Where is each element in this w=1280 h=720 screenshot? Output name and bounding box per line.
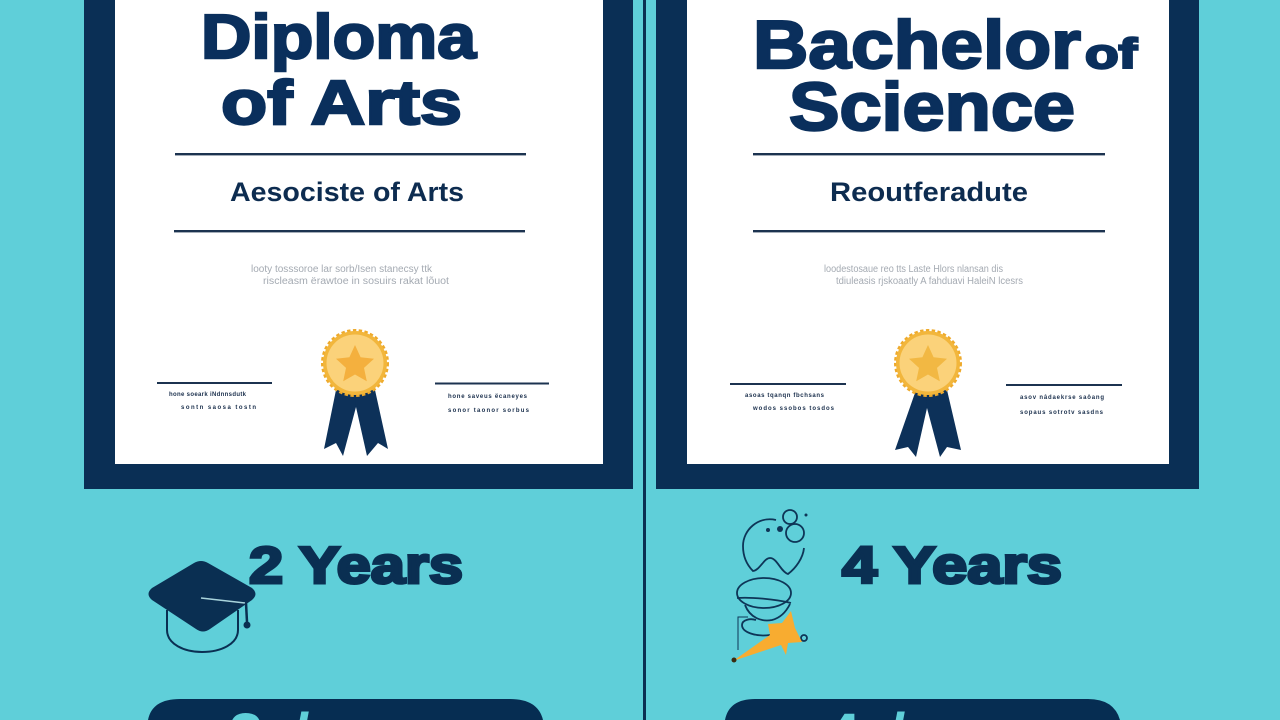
left signature: wodos ssobos tosdos	[752, 406, 835, 412]
fine print: loodestosaue reo tts Laste Hlors nlansan dis	[824, 264, 1003, 275]
heading: diploma of arts: of Arts	[221, 69, 462, 138]
heading: bachelor of science: of	[1085, 30, 1138, 77]
subtitle: Aesociste of Arts	[230, 177, 464, 207]
fine print	[251, 264, 449, 287]
right signature: hone saveus ëcaneyes	[448, 394, 528, 400]
heading: bachelor of science: Bachelor	[753, 7, 1081, 83]
duration: 2 years: 2 Years	[249, 537, 463, 595]
icon: abstract doodle with star	[732, 510, 808, 662]
fine print	[824, 264, 1023, 287]
icon: award ribbon	[322, 330, 388, 456]
heading: diploma of arts: Diploma	[201, 3, 477, 72]
panel: bachelor of science	[656, 0, 1199, 489]
certificate frame	[84, 0, 633, 489]
right signature	[435, 382, 549, 414]
icon: graduation cap	[148, 561, 256, 652]
fine print: tdiuleasis rjskoaatly A fahduavi HaleiN lcesrs	[836, 276, 1023, 287]
certificate frame	[656, 0, 1199, 489]
badge: right pill	[725, 699, 1120, 720]
heading: bachelor of science	[753, 7, 1138, 145]
heading: bachelor of science: Science	[789, 69, 1075, 145]
fine print: looty tosssoroe lar sorb/Isen stanecsy ttk	[251, 264, 433, 275]
heading: diploma of arts	[201, 3, 477, 138]
left signature	[157, 382, 272, 411]
icon: award ribbon	[895, 330, 961, 457]
right signature: sopaus sotrotv sasdns	[1020, 410, 1104, 416]
panel: diploma of arts	[84, 0, 633, 489]
right signature	[1006, 384, 1122, 416]
certificate paper	[115, 0, 603, 464]
certificate paper	[687, 0, 1169, 464]
left signature: hone soeark iNdnnsdutk	[169, 392, 247, 398]
badge: left pill	[148, 699, 543, 720]
left signature	[730, 383, 846, 412]
right signature: asov nâdaekrse saôang	[1020, 395, 1104, 401]
subtitle: Reoutferadute	[830, 177, 1028, 207]
duration: 4 years: 4 Years	[842, 537, 1062, 595]
left signature: sontn saosa tostn	[181, 405, 256, 411]
left signature: asoas tqanqn fbchsans	[745, 393, 825, 399]
right signature: sonor taonor sorbus	[448, 408, 530, 414]
fine print: riscleasm ërawtoe in sosuirs rakat lõuot	[263, 276, 449, 287]
